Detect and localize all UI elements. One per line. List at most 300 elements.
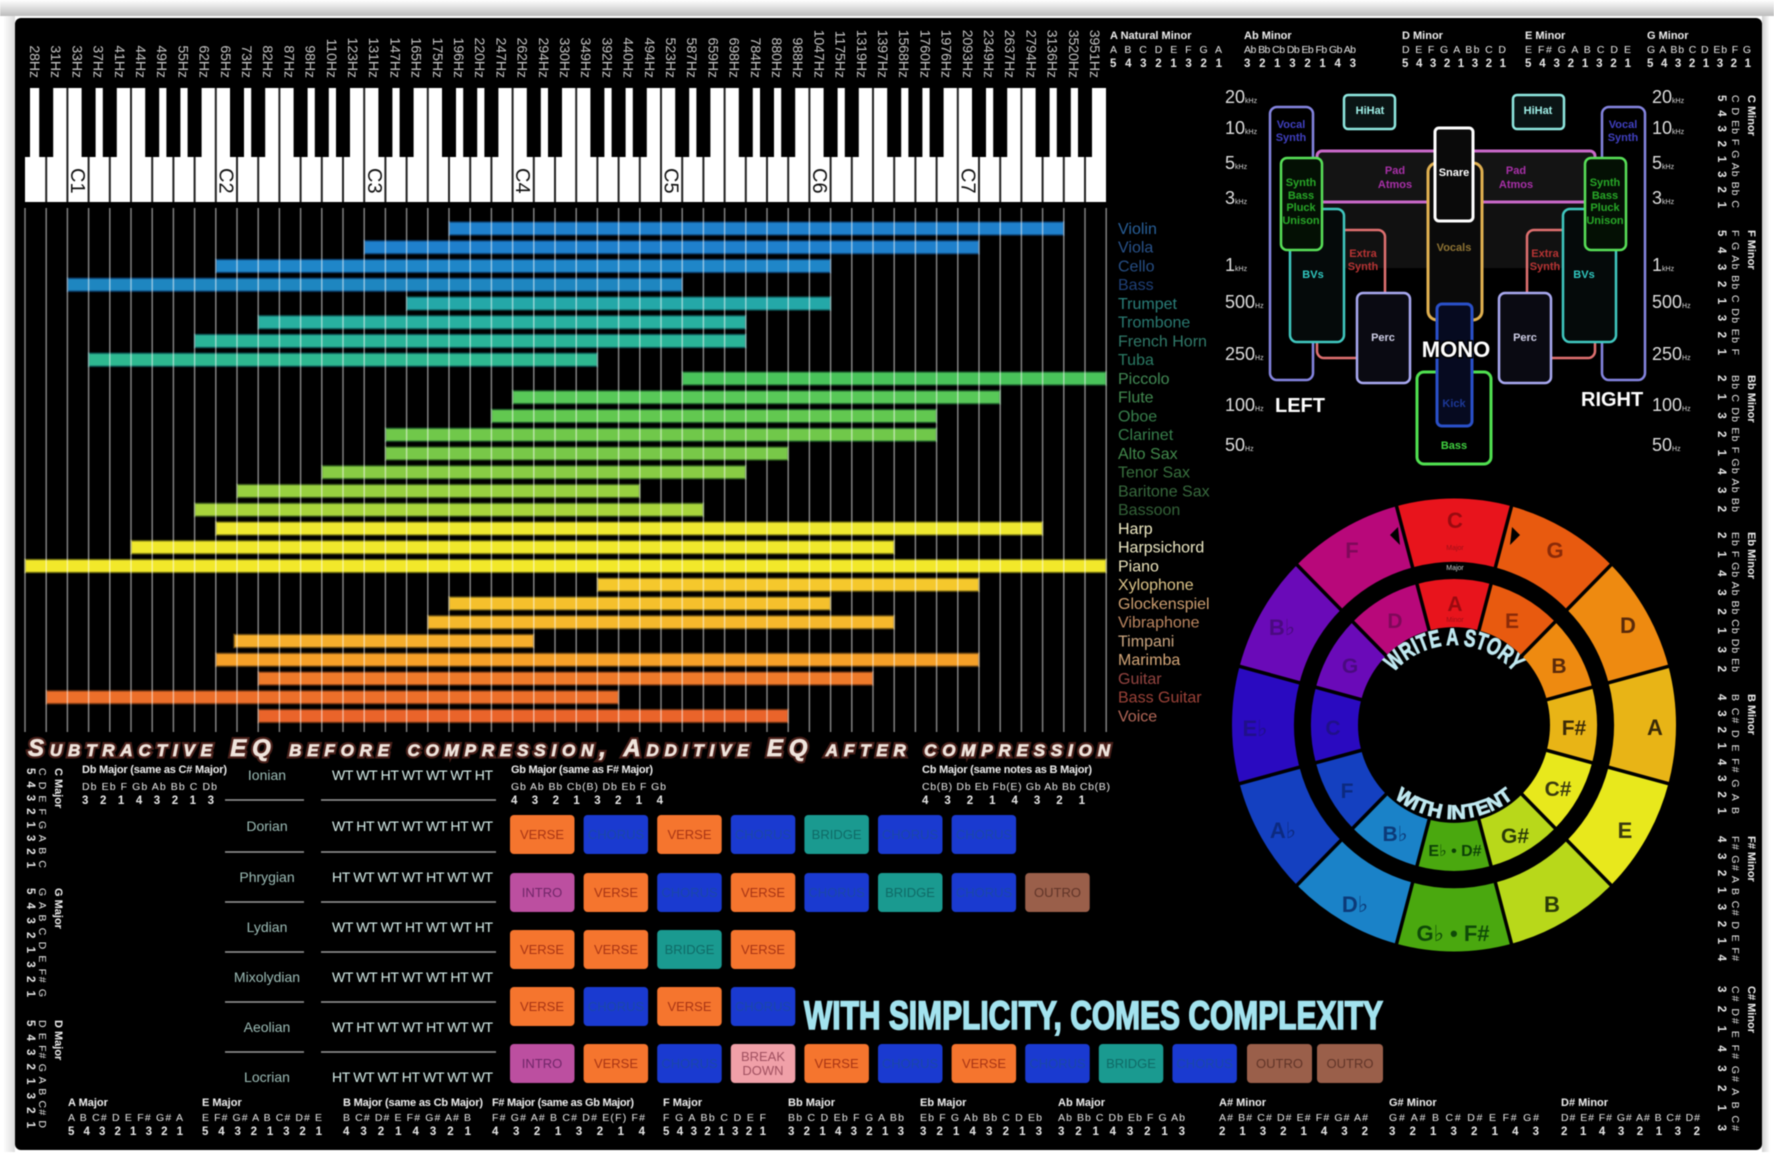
synth bass pluck unison boxes: Synth <box>1286 177 1317 189</box>
row 4: VERSE <box>667 999 712 1014</box>
frequency labels above keyboard: 349Hz <box>578 38 594 78</box>
outer key labels: D♭ <box>1342 892 1368 917</box>
kick box: Kick <box>1442 398 1466 410</box>
bottom scales: B C# D# E F# G# A# B <box>343 1112 471 1124</box>
left rotated major scales: G Major <box>52 888 64 930</box>
right rotated minor scales: Eb F Gb Ab Bb Cb Db Eb <box>1729 532 1741 672</box>
top minor scales: Ab Minor <box>1244 30 1292 42</box>
pad atmos band: Pad <box>1506 165 1526 177</box>
instrument labels: Violin <box>1118 221 1157 238</box>
frequency labels above keyboard: 55Hz <box>175 45 191 78</box>
synth bass pluck unison boxes: Synth <box>1590 177 1621 189</box>
perc boxes <box>1357 293 1551 383</box>
vocal synth labels: Vocal <box>1609 119 1637 131</box>
row 2: VERSE <box>594 885 638 900</box>
bass box: Bass <box>1441 440 1467 452</box>
frequency labels above keyboard: 110Hz <box>324 39 340 78</box>
row 1: VERSE <box>520 827 564 842</box>
frequency scale right <box>1652 87 1691 455</box>
instrument labels: Glockenspiel <box>1118 596 1210 613</box>
top minor scales: 5 4 3 2 1 3 2 1 <box>1525 58 1632 70</box>
bottom scales: 5 4 3 2 1 3 2 1 <box>202 1126 323 1138</box>
frequency labels above keyboard: 784Hz <box>748 38 764 78</box>
mode step patterns: WT HT WT WT WT HT WT <box>332 818 493 834</box>
mode names: Lydian <box>247 919 287 935</box>
instrument labels: Xylophone <box>1118 577 1194 594</box>
left rotated major scales: D E F# G A B C# D <box>36 1020 48 1128</box>
bottom scales: E Major <box>202 1097 242 1109</box>
frequency labels above keyboard: 1175Hz <box>833 31 849 78</box>
row 1 <box>510 815 1016 854</box>
frequency scale right: 3kHz <box>1652 188 1675 208</box>
frequency labels above keyboard: 41Hz <box>112 45 128 78</box>
modes table <box>225 767 496 1085</box>
right rotated minor scales: Bb C Db Eb F Gb Ab Bb <box>1729 375 1741 512</box>
right rotated minor scales: B C# D E F# G A B <box>1729 694 1741 814</box>
BVs boxes: BVs <box>1573 269 1595 281</box>
left rotated major scales: D Major <box>52 1020 64 1061</box>
small major/minor captions <box>1446 545 1464 624</box>
outer key labels <box>1242 508 1663 946</box>
row 5: VERSE <box>815 1056 859 1071</box>
vocals box: Vocals <box>1437 242 1471 254</box>
frequency labels above keyboard: 165Hz <box>409 38 425 78</box>
instrument labels: Harp <box>1118 521 1153 538</box>
frequency labels above keyboard: 659Hz <box>705 38 721 78</box>
outer key labels: A♭ <box>1270 818 1296 843</box>
instrument labels: Clarinet <box>1118 427 1174 444</box>
bottom scales: Bb Major <box>788 1097 836 1109</box>
top minor scales: A B C D E F G A <box>1110 44 1222 56</box>
octave labels <box>66 168 978 194</box>
row 4: VERSE <box>520 999 564 1014</box>
piano keyboard <box>25 88 1106 202</box>
row 4 <box>510 987 795 1026</box>
perc boxes: Perc <box>1513 332 1537 344</box>
instrument labels: Piano <box>1118 558 1159 576</box>
instrument labels: Viola <box>1118 240 1153 257</box>
outer key labels: G <box>1546 538 1564 563</box>
bottom scales: D# E# F# G# A# B C# D# <box>1561 1112 1700 1124</box>
pad atmos band: Atmos <box>1499 179 1533 191</box>
row 5: CHORUS <box>1029 1056 1086 1071</box>
heading: EQ tip: Subtractive EQ before compression, Additive EQ after compression <box>28 735 1111 762</box>
top minor scales: E F# G A B C D E <box>1525 44 1631 56</box>
right rotated minor scales: C D Eb F G Ab Bb C <box>1729 95 1741 208</box>
BVs boxes: BVs <box>1302 269 1324 281</box>
frequency scale left: 100Hz <box>1225 395 1264 415</box>
row 3 <box>510 930 795 969</box>
top flat major scales: Cb Major (same notes as B Major) <box>922 764 1092 776</box>
bottom scales: F G A Bb C D E F <box>663 1112 766 1124</box>
extra synth boxes: Synth <box>1530 261 1561 273</box>
top flat major scales: Gb Major (same as F# Major) <box>511 764 653 776</box>
channel labels: MONO <box>1422 337 1490 362</box>
right rotated minor scales: Bb Minor <box>1745 375 1757 423</box>
instrument labels: Bass Guitar <box>1118 690 1202 707</box>
frequency scale right: 100Hz <box>1652 395 1691 415</box>
inner key labels: B♭ <box>1382 823 1408 846</box>
frequency scale right: 250Hz <box>1652 344 1691 364</box>
frequency scale right: 50Hz <box>1652 435 1681 455</box>
instrument labels: Tenor Sax <box>1118 465 1190 482</box>
synth bass pluck unison boxes: Pluck <box>1590 202 1621 214</box>
hi-hat boxes: HiHat <box>1524 105 1553 117</box>
frequency labels above keyboard: 33Hz <box>69 45 85 78</box>
vocal synth labels: Synth <box>1276 132 1307 144</box>
mode names <box>234 767 300 1085</box>
top flat major scales: 4 3 2 1 3 2 1 4 <box>511 795 664 807</box>
instrument labels: Timpani <box>1118 634 1174 650</box>
arc text: with intent: WITH INTENT <box>1396 786 1511 820</box>
right rotated minor scales: 2 1 3 2 1 4 3 2 <box>1715 375 1727 512</box>
frequency labels above keyboard: 123Hz <box>345 38 361 78</box>
row 4: CHORUS <box>735 999 791 1014</box>
song structure blocks <box>510 815 1383 1083</box>
top minor scales: E Minor <box>1525 30 1566 42</box>
right rotated minor scales: 5 4 3 2 1 3 2 1 <box>1715 230 1727 356</box>
frequency labels above keyboard: 37Hz <box>91 45 107 78</box>
mode names: Locrian <box>244 1069 290 1085</box>
instrument labels: Voice <box>1118 708 1157 726</box>
frequency labels above keyboard: 147Hz <box>387 38 403 78</box>
top minor scales: Ab Bb Cb Db Eb Fb Gb Ab <box>1244 44 1356 56</box>
instrument labels <box>1118 221 1210 726</box>
row 2 <box>510 873 1090 912</box>
frequency scale right: 10kHz <box>1652 118 1685 138</box>
right rotated minor scales <box>1715 95 1757 1131</box>
left rotated major scales: 5 4 3 2 1 3 2 1 <box>24 768 36 869</box>
outer ring: major keys <box>1184 449 1724 1001</box>
inner key labels: D <box>1387 610 1403 633</box>
frequency labels above keyboard: 262Hz <box>515 38 531 78</box>
vocal synth boxes <box>1270 107 1645 380</box>
frequency labels above keyboard: 247Hz <box>493 38 509 78</box>
frequency labels above keyboard <box>27 30 1103 78</box>
inner key labels: E♭ • D# <box>1428 843 1482 860</box>
top flat major scales: Db Major (same as C# Major) <box>82 764 227 776</box>
frequency labels above keyboard: 196Hz <box>451 38 467 78</box>
heading: EQ tip: Subtractive EQ before compression, Additive EQ after compression <box>28 735 1111 762</box>
row 2: CHORUS <box>808 885 865 900</box>
octave labels: C6 <box>808 168 830 194</box>
frequency labels above keyboard: 73Hz <box>239 45 255 78</box>
row 5: OUTRO <box>1256 1056 1303 1071</box>
instrument labels: Trumpet <box>1118 296 1178 313</box>
frequency scale right: 500Hz <box>1652 292 1691 312</box>
row 3: VERSE <box>741 942 785 957</box>
right rotated minor scales: Eb Minor <box>1745 532 1757 580</box>
right rotated minor scales: F G Ab Bb C Db Eb F <box>1729 230 1741 355</box>
row 2: CHORUS <box>661 885 718 900</box>
circle of fifths wheel <box>1231 498 1677 952</box>
frequency labels above keyboard: 28Hz <box>27 45 43 78</box>
right rotated minor scales: B Minor <box>1745 694 1757 736</box>
frequency scale left: 500Hz <box>1225 292 1264 312</box>
mode names: Ionian <box>248 767 286 783</box>
slogan: WITH SIMPLICITY, COMES COMPLEXITY <box>804 994 1383 1038</box>
extra synth boxes: Extra <box>1531 248 1560 260</box>
instrument labels: Baritone Sax <box>1118 484 1210 500</box>
snare box: Snare <box>1439 167 1469 179</box>
frequency labels above keyboard: 440Hz <box>621 38 637 78</box>
top minor scales: 3 2 1 3 2 1 4 3 <box>1244 58 1356 70</box>
frequency labels above keyboard: 65Hz <box>218 45 234 78</box>
row 5: VERSE <box>962 1056 1006 1071</box>
bottom scales: B Major (same as Cb Major) <box>343 1097 483 1109</box>
frequency scale left: 5kHz <box>1225 153 1248 173</box>
channel labels: RIGHT <box>1581 389 1643 411</box>
left rotated major scales: C D E F G A B C <box>36 768 48 868</box>
right rotated minor scales: 3 2 1 4 3 2 1 3 <box>1715 986 1727 1131</box>
hi-hat boxes: HiHat <box>1356 105 1385 117</box>
right rotated minor scales: F Minor <box>1745 230 1757 270</box>
instrument labels: Flute <box>1118 390 1154 407</box>
frequency labels above keyboard: 1976Hz <box>939 30 955 78</box>
pad atmos band <box>1317 151 1595 202</box>
top minor scales: D E F G A Bb C D <box>1402 44 1506 56</box>
right rotated minor scales: 2 1 4 3 2 1 3 2 <box>1715 532 1727 672</box>
bottom scales: E F# G# A B C# D# E <box>202 1112 322 1124</box>
mode step patterns: WT HT WT WT HT WT WT <box>332 1019 493 1035</box>
small major/minor captions: Major <box>1446 545 1464 552</box>
top minor scales: G Minor <box>1647 30 1689 42</box>
left rotated major scales: 5 4 3 2 1 3 2 1 <box>24 888 36 998</box>
instrument labels: Harpsichord <box>1118 540 1204 557</box>
frequency scale left: 50Hz <box>1225 435 1254 455</box>
frequency labels above keyboard: 494Hz <box>642 38 658 78</box>
octave labels: C3 <box>363 168 385 194</box>
right rotated minor scales: F# Minor <box>1745 836 1757 883</box>
outer key labels: B♭ <box>1269 615 1295 640</box>
synth bass pluck unison boxes: Bass <box>1592 190 1618 202</box>
frequency scale right: 20kHz <box>1652 87 1685 107</box>
row 2: CHORUS <box>956 885 1012 900</box>
row 2: OUTRO <box>1034 885 1081 900</box>
bottom scales: 3 2 1 3 2 1 4 3 <box>1389 1126 1539 1138</box>
frequency labels above keyboard: 98Hz <box>303 45 319 78</box>
synth bass pluck unison boxes: Unison <box>1282 215 1320 227</box>
pad atmos band: Atmos <box>1378 179 1412 191</box>
frequency scale left: 3kHz <box>1225 188 1248 208</box>
hi-hat boxes <box>1344 95 1564 129</box>
vocal synth labels <box>1276 119 1639 144</box>
left rotated major scales: G A B C D E F# G <box>36 888 48 997</box>
right rotated minor scales: C# Minor <box>1745 986 1757 1034</box>
frequency labels above keyboard: 3136Hz <box>1045 30 1061 78</box>
mode names: Phrygian <box>239 869 295 885</box>
mode names: Mixolydian <box>234 969 300 985</box>
row 5: INTRO <box>522 1056 562 1071</box>
bass box <box>1417 372 1491 464</box>
bottom scales: 4 3 2 1 3 2 1 4 <box>492 1126 646 1138</box>
channel labels: LEFT <box>1275 395 1325 417</box>
synth bass pluck unison boxes: Unison <box>1586 215 1624 227</box>
frequency labels above keyboard: 2794Hz <box>1023 30 1039 78</box>
bottom scales: 5 4 3 2 1 3 2 1 <box>663 1126 767 1138</box>
inner key labels <box>1325 593 1587 860</box>
instrument labels: French Horn <box>1118 334 1207 350</box>
bottom scales: G# A# B C# D# E F# G# <box>1389 1112 1539 1124</box>
frequency labels above keyboard: 1568Hz <box>896 30 912 78</box>
outer key labels: B <box>1544 892 1560 917</box>
inner key labels: G# <box>1501 825 1529 848</box>
bottom scales: A Major <box>68 1097 109 1109</box>
right rotated minor scales: C Minor <box>1745 95 1757 137</box>
row 5: CHORUS <box>882 1056 938 1071</box>
bottom scales: D# Minor <box>1561 1097 1609 1109</box>
instrument labels: Tuba <box>1118 352 1154 369</box>
small major/minor captions: Major <box>1446 565 1464 572</box>
frequency labels above keyboard: 988Hz <box>790 38 806 78</box>
octave labels: C2 <box>214 168 236 194</box>
bottom scales: 2 1 4 3 2 1 3 2 <box>1561 1126 1700 1138</box>
octave labels: C7 <box>956 168 978 194</box>
top minor scales <box>1110 30 1752 70</box>
left rotated major scales <box>24 768 64 1129</box>
frequency labels above keyboard: 698Hz <box>727 38 743 78</box>
top minor scales: 5 4 3 2 1 3 2 1 <box>1110 58 1223 70</box>
row 1: CHORUS <box>882 827 938 842</box>
bottom scales: Eb F G Ab Bb C D Eb <box>920 1112 1042 1124</box>
frequency scale left: 250Hz <box>1225 344 1264 364</box>
frequency labels above keyboard: 2093Hz <box>960 30 976 78</box>
row 2: BRIDGE <box>885 885 935 900</box>
frequency labels above keyboard: 294Hz <box>536 38 552 78</box>
right rotated minor scales: F# G# A B C# D E F# <box>1729 836 1741 961</box>
right rotated minor scales: 4 3 2 1 3 2 1 4 <box>1715 836 1727 962</box>
frequency scale right: 1kHz <box>1652 255 1675 275</box>
frequency labels above keyboard: 87Hz <box>281 45 297 78</box>
bottom scales: 3 2 1 4 3 2 1 3 <box>788 1126 904 1138</box>
bottom scales: A# Minor <box>1219 1097 1267 1109</box>
BVs boxes <box>1290 209 1616 342</box>
octave labels: C1 <box>66 168 88 194</box>
left rotated major scales: C Major <box>52 768 64 809</box>
extra synth boxes <box>1317 230 1595 358</box>
mode names: Aeolian <box>244 1019 290 1035</box>
top minor scales: A Natural Minor <box>1110 30 1192 42</box>
bottom scales: Ab Bb C Db Eb F G Ab <box>1058 1112 1185 1124</box>
row 5: VERSE <box>594 1056 638 1071</box>
frequency scale left: 1kHz <box>1225 255 1248 275</box>
channel labels <box>1275 337 1643 417</box>
outer key labels: F <box>1345 538 1359 563</box>
top minor scales: G A Bb C D Eb F G <box>1647 44 1751 56</box>
mode step patterns <box>332 767 493 1085</box>
frequency labels above keyboard: 220Hz <box>472 38 488 78</box>
top flat major scales: 3 2 1 4 3 2 1 3 <box>82 795 214 807</box>
snare box <box>1435 128 1473 221</box>
stereo mix frequency diagram <box>1225 87 1691 464</box>
inner key labels: G <box>1342 655 1358 678</box>
frequency scale left <box>1225 87 1264 455</box>
octave labels: C5 <box>660 168 682 194</box>
right rotated minor scales: C# D# E F# G# A B C# <box>1729 986 1741 1131</box>
frequency scale left: 20kHz <box>1225 87 1258 107</box>
bottom scales: F# Major (same as Gb Major) <box>492 1097 634 1109</box>
top flat major scales <box>82 764 1110 807</box>
frequency labels above keyboard: 82Hz <box>260 45 276 78</box>
row 1: CHORUS <box>588 827 644 842</box>
frequency labels above keyboard: 175Hz <box>430 38 446 78</box>
inner key labels: F# <box>1562 717 1587 740</box>
octave labels: C4 <box>511 168 533 194</box>
row 5: BRIDGE <box>1106 1056 1156 1071</box>
frequency labels above keyboard: 44Hz <box>133 45 149 78</box>
row 5: BREAK <box>741 1049 785 1064</box>
instrument labels: Vibraphone <box>1118 615 1200 632</box>
pad atmos band: Pad <box>1385 165 1405 177</box>
instrument labels: Piccolo <box>1118 371 1170 388</box>
frequency labels above keyboard: 523Hz <box>663 38 679 78</box>
vocal synth labels: Vocal <box>1277 119 1305 131</box>
bottom scales: G# Minor <box>1389 1097 1437 1109</box>
instrument range bar chart <box>25 208 1106 732</box>
outer key labels: A <box>1647 715 1663 740</box>
vocals box <box>1428 163 1482 320</box>
bottom scales: A B C# D E F# G# A <box>68 1112 183 1124</box>
kick box <box>1437 304 1472 426</box>
frequency labels above keyboard: 2637Hz <box>1002 30 1018 78</box>
bottom scales: Bb C D Eb F G A Bb <box>788 1112 904 1124</box>
top flat major scales: Gb Ab Bb Cb(B) Db Eb F Gb <box>511 781 666 793</box>
top minor scales: D Minor <box>1402 30 1444 42</box>
row 3: VERSE <box>520 942 564 957</box>
synth bass pluck unison boxes <box>1281 158 1626 250</box>
row 3: VERSE <box>594 942 638 957</box>
mode names: Dorian <box>246 818 288 834</box>
mode step patterns: WT WT HT WT WT WT HT <box>332 767 493 783</box>
inner key labels: A <box>1447 593 1463 616</box>
mode step patterns: HT WT WT WT HT WT WT <box>332 869 493 885</box>
extra synth boxes: Synth <box>1348 261 1379 273</box>
instrument labels: Guitar <box>1118 671 1162 688</box>
row 5: DOWN <box>742 1063 784 1078</box>
inner key labels: C# <box>1545 778 1572 801</box>
inner ring: minor keys <box>1286 553 1622 897</box>
outer key labels: G♭ • F# <box>1416 921 1490 946</box>
instrument labels: Marimba <box>1118 652 1180 669</box>
outer key labels: D <box>1620 613 1636 638</box>
dark mid band <box>1317 202 1595 268</box>
frequency labels above keyboard: 880Hz <box>769 38 785 78</box>
bottom scales: Ab Major <box>1058 1097 1106 1109</box>
vocal synth labels: Synth <box>1608 132 1639 144</box>
inner key labels: F <box>1341 780 1354 803</box>
row 2: INTRO <box>522 885 562 900</box>
outer key labels: E <box>1618 818 1632 843</box>
right rotated minor scales: 5 4 3 2 1 3 2 1 <box>1715 95 1727 209</box>
bottom scales: 2 1 3 2 1 4 3 2 <box>1219 1126 1368 1138</box>
bottom scales: F# G# A# B C# D# E(F) F# <box>492 1112 645 1124</box>
row 3: BRIDGE <box>665 942 715 957</box>
mode step patterns: WT WT HT WT WT HT WT <box>332 969 493 985</box>
frequency labels above keyboard: 392Hz <box>599 38 615 78</box>
inner key labels: B <box>1551 655 1567 678</box>
row 1: VERSE <box>667 827 712 842</box>
frequency labels above keyboard: 3520Hz <box>1066 30 1082 78</box>
extra synth boxes: Extra <box>1349 248 1378 260</box>
instrument labels: Bassoon <box>1118 502 1180 519</box>
left rotated major scales: 5 4 3 2 1 3 2 1 <box>24 1020 36 1129</box>
frequency labels above keyboard: 49Hz <box>154 45 170 78</box>
frequency labels above keyboard: 31Hz <box>48 45 64 78</box>
bottom scales: F Major <box>663 1097 703 1109</box>
frequency labels above keyboard: 2349Hz <box>981 30 997 78</box>
top flat major scales: Cb(B) Db Eb Fb(E) Gb Ab Bb Cb(B) <box>922 781 1110 793</box>
synth bass pluck unison boxes: Pluck <box>1286 202 1317 214</box>
